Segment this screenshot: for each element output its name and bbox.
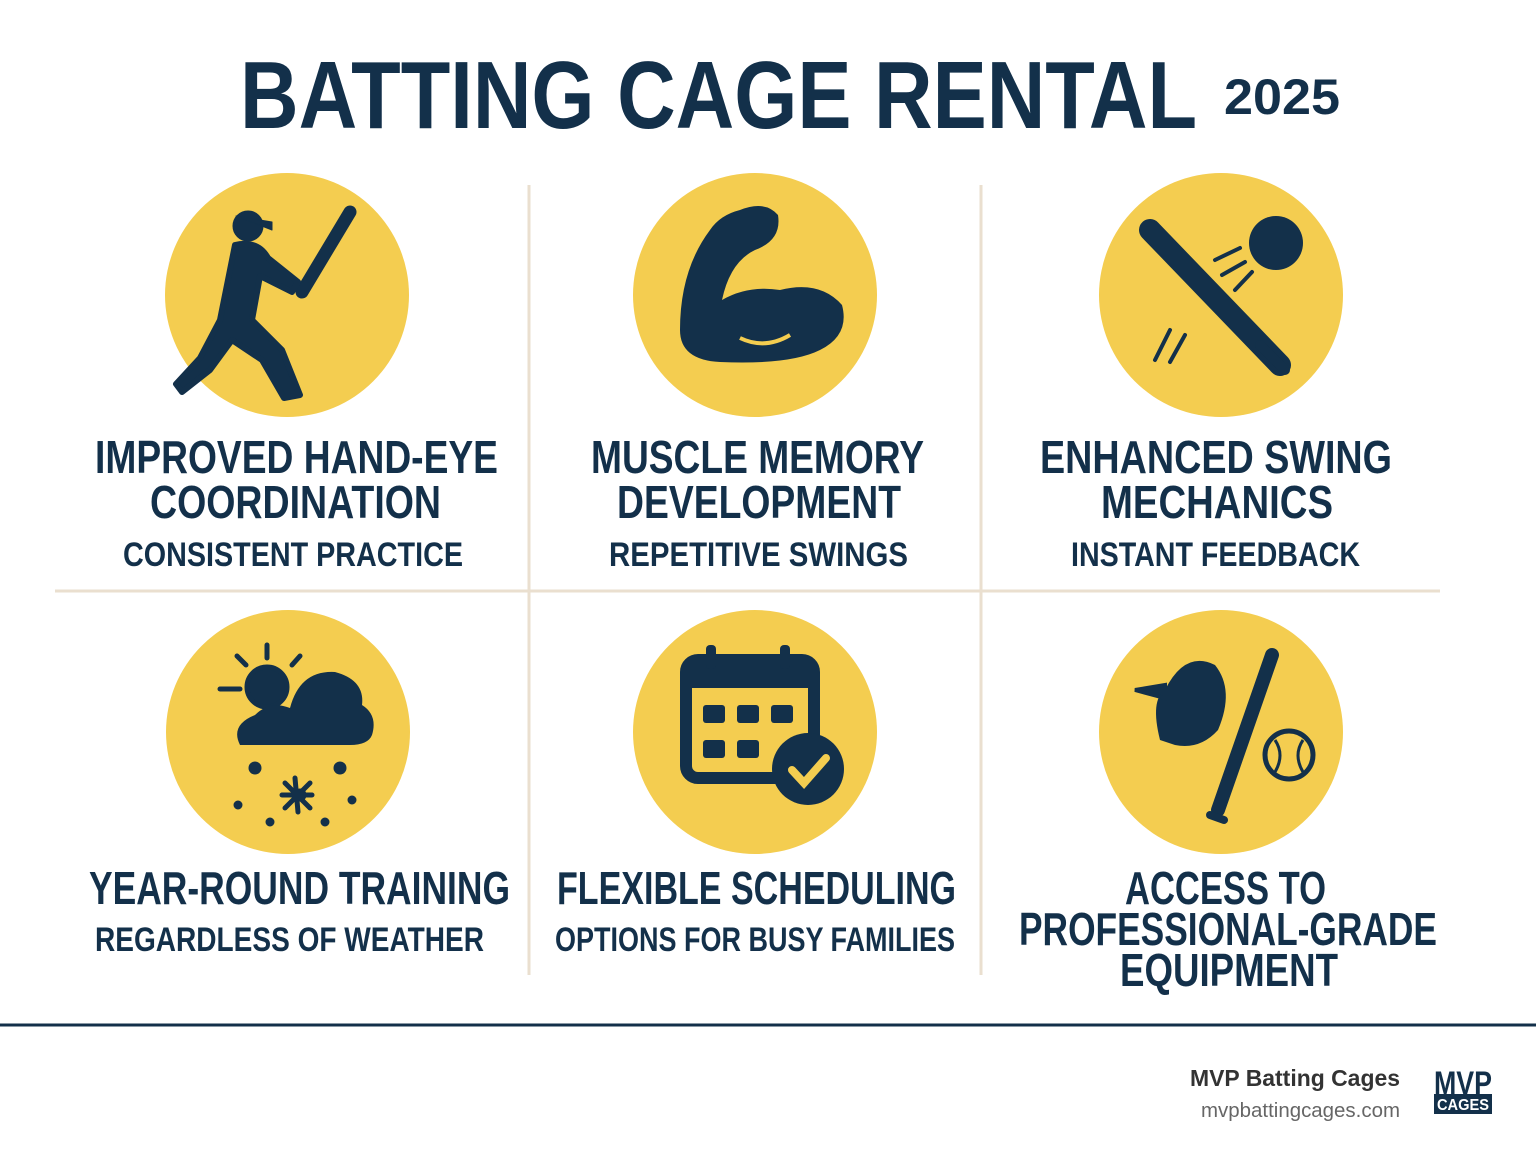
heading: MECHANICS (1101, 476, 1333, 528)
heading: COORDINATION (150, 476, 441, 528)
logo: CAGES (1437, 1097, 1489, 1114)
heading: FLEXIBLE SCHEDULING (557, 862, 956, 914)
panel: professional equipment (1019, 610, 1437, 996)
icon: calendar (633, 610, 877, 854)
subheading: REGARDLESS OF WEATHER (95, 921, 484, 959)
panel: hand-eye coordination (95, 173, 498, 574)
icon: batter (165, 173, 409, 417)
panel: muscle memory (591, 173, 924, 574)
heading: EQUIPMENT (1120, 944, 1338, 996)
panel: year-round training (89, 610, 510, 959)
icon: weather (166, 610, 410, 854)
heading (591, 431, 924, 528)
heading: YEAR-ROUND TRAINING (89, 862, 510, 914)
logo: MVP (1434, 1065, 1492, 1101)
icon: bat and ball (1099, 173, 1343, 417)
subheading: REPETITIVE SWINGS (609, 536, 908, 574)
panel: flexible scheduling (555, 610, 956, 959)
heading (1019, 862, 1437, 996)
subheading: INSTANT FEEDBACK (1071, 536, 1360, 574)
panel: swing mechanics (1040, 173, 1392, 574)
heading: ACCESS TO (1125, 862, 1326, 914)
footer brand text: MVP Batting Cages (1190, 1065, 1400, 1091)
icon: flexed arm (633, 173, 877, 417)
title: BATTING CAGE RENTAL (240, 42, 1197, 149)
heading (95, 431, 498, 528)
heading: DEVELOPMENT (617, 476, 901, 528)
heading: ENHANCED SWING (1040, 431, 1392, 483)
heading (1040, 431, 1392, 528)
heading: MUSCLE MEMORY (591, 431, 924, 483)
logo (1434, 1065, 1492, 1114)
title: 2025 (1224, 69, 1340, 125)
heading: IMPROVED HAND-EYE (95, 431, 498, 483)
footer brand text: mvpbattingcages.com (1201, 1100, 1400, 1122)
subheading: CONSISTENT PRACTICE (123, 536, 463, 574)
subheading: OPTIONS FOR BUSY FAMILIES (555, 921, 955, 959)
icon: helmet bat ball (1099, 610, 1343, 854)
footer brand text (1190, 1065, 1400, 1122)
